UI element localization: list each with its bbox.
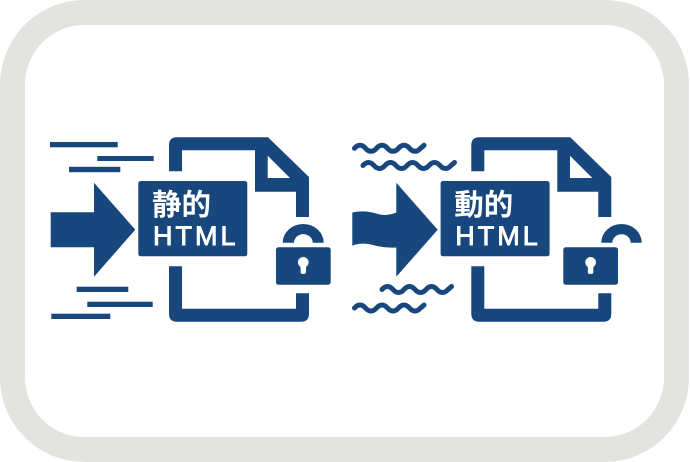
document icon [169, 137, 309, 322]
panel: static HTML [50, 137, 331, 322]
label: dynamic HTML: 動的 [454, 189, 513, 222]
open padlock [563, 224, 642, 285]
closed padlock [276, 224, 331, 285]
label: static HTML: HTML [153, 221, 238, 251]
wavy arrow [352, 183, 438, 277]
label: static HTML: 静的 [152, 189, 211, 222]
document icon [471, 137, 611, 322]
panel: dynamic HTML [352, 137, 642, 322]
label: dynamic HTML [441, 181, 550, 256]
speed lines bottom [51, 287, 153, 319]
wavy lines bottom [354, 286, 452, 311]
label: static HTML [138, 181, 247, 256]
straight arrow [51, 183, 135, 277]
label: dynamic HTML: HTML [455, 221, 541, 251]
speed lines top [50, 142, 154, 172]
wavy lines top [354, 145, 454, 168]
